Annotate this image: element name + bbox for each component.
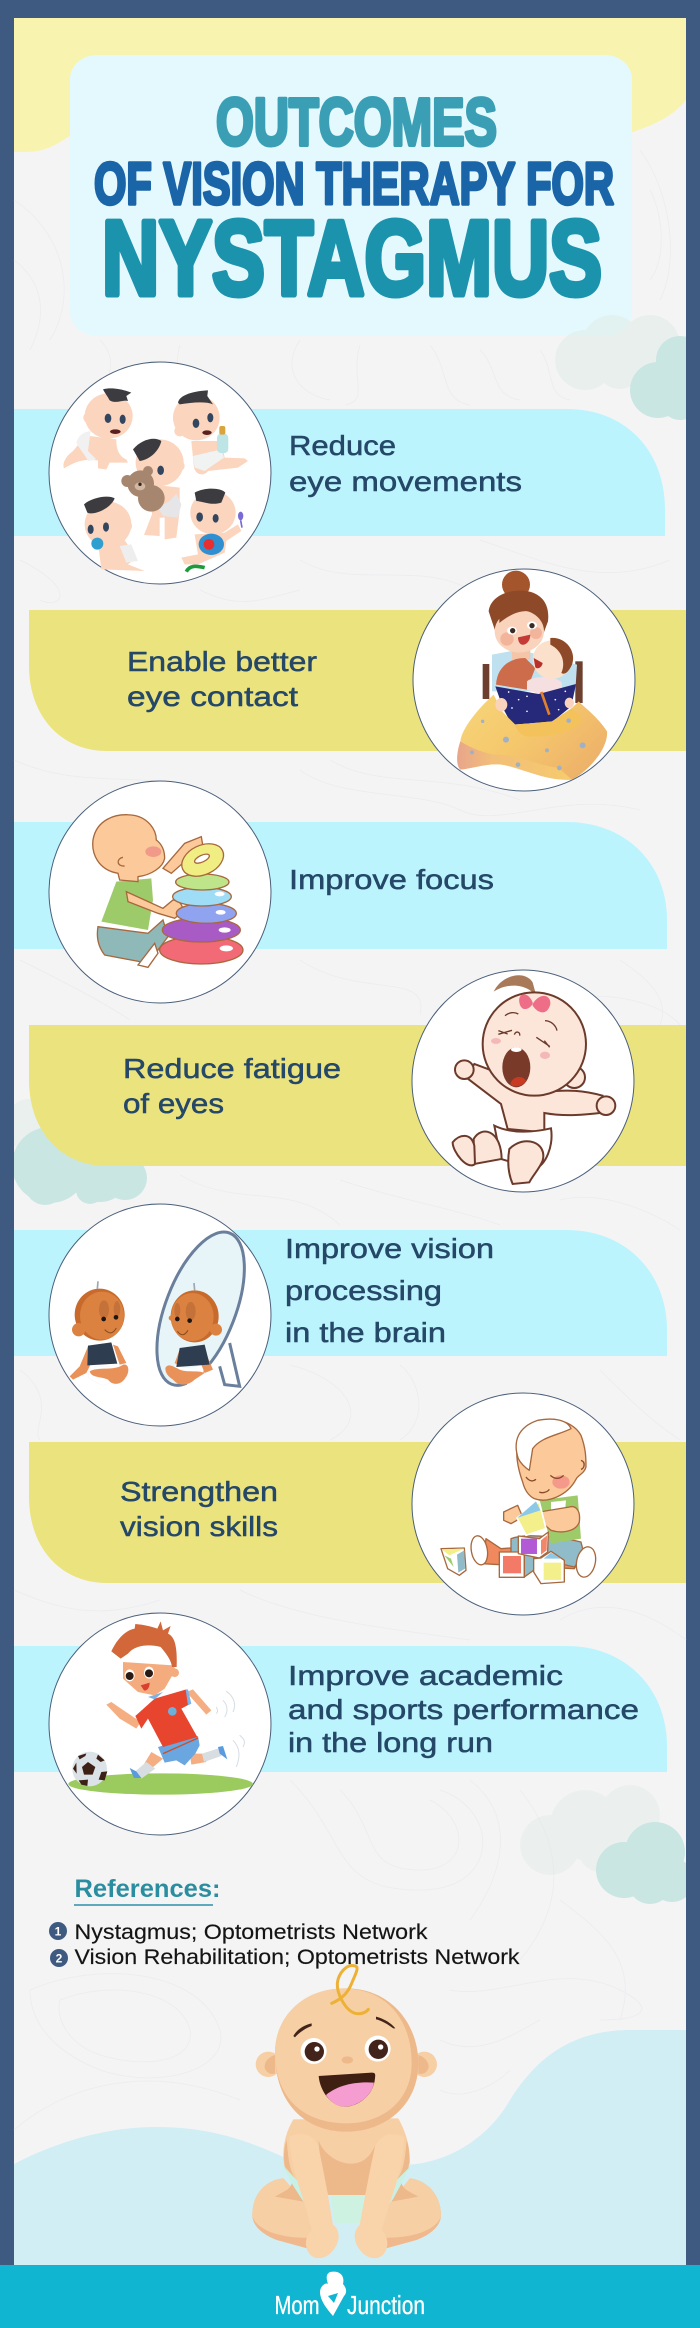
title line: outcomes: OUTCOMES bbox=[216, 85, 497, 160]
text: improve academic and sports performance in the long run: and sports performance bbox=[288, 1694, 639, 1725]
text: enable better eye contact: eye contact bbox=[127, 681, 298, 712]
yellow top shape bbox=[14, 18, 686, 152]
icon: boy kicking ball bbox=[49, 1613, 271, 1835]
panel: reduce eye movements bbox=[14, 362, 665, 584]
illustration: happy sitting baby bbox=[252, 1966, 441, 2258]
title panel bbox=[70, 55, 632, 336]
text: enable better eye contact: Enable better bbox=[127, 646, 317, 677]
text: improve academic and sports performance in the long run: in the long run bbox=[288, 1727, 493, 1758]
panel: enable better eye contact bbox=[29, 569, 686, 791]
reference 1: 1 bbox=[55, 1924, 62, 1938]
text: strengthen vision skills: Strengthen bbox=[120, 1476, 278, 1507]
text: improve vision processing in the brain: Improve vision bbox=[285, 1233, 494, 1264]
text: strengthen vision skills: vision skills bbox=[120, 1511, 278, 1542]
text: reduce eye movements: Reduce bbox=[289, 430, 396, 461]
text: improve focus: Improve focus bbox=[289, 864, 494, 895]
cloud: top right bbox=[555, 315, 700, 420]
logo: momjunction: Junction bbox=[347, 2290, 425, 2320]
references heading: References: bbox=[74, 1875, 220, 1903]
icon: five babies bbox=[49, 362, 271, 584]
logo: momjunction: Mom bbox=[274, 2290, 320, 2320]
icon: mother reading to baby bbox=[413, 569, 635, 791]
references bbox=[49, 1875, 520, 1969]
reference 2: Vision Rehabilitation; Optometrists Network bbox=[74, 1946, 520, 1969]
text: reduce eye movements: eye movements bbox=[289, 466, 522, 497]
text: improve vision processing in the brain: in the brain bbox=[285, 1317, 446, 1348]
text: reduce fatigue of eyes: of eyes bbox=[123, 1088, 224, 1119]
icon: baby stacking rings bbox=[49, 781, 271, 1003]
reference 2: 2 bbox=[56, 1952, 63, 1966]
icon: baby at mirror bbox=[49, 1204, 271, 1426]
panel: improve vision processing bbox=[14, 1204, 667, 1426]
reference 1: Nystagmus; Optometrists Network bbox=[74, 1921, 428, 1944]
footer bar bbox=[0, 2265, 700, 2328]
panel: reduce fatigue of eyes bbox=[29, 970, 686, 1192]
logo: momjunction bbox=[274, 2272, 425, 2320]
panel: strengthen vision skills bbox=[29, 1393, 686, 1615]
panel: improve academic and sports performance bbox=[14, 1613, 667, 1835]
panel: improve focus bbox=[14, 781, 667, 1003]
text: improve vision processing in the brain: processing bbox=[285, 1275, 442, 1306]
cloud: left bbox=[4, 1099, 147, 1205]
text: improve academic and sports performance in the long run: Improve academic bbox=[288, 1660, 563, 1691]
icon: yawning baby bbox=[412, 970, 634, 1192]
bottom hills bbox=[14, 2030, 686, 2265]
icon: baby with blocks bbox=[412, 1393, 634, 1615]
text: reduce fatigue of eyes: Reduce fatigue bbox=[123, 1053, 341, 1084]
cloud: bottom right bbox=[520, 1785, 694, 1904]
